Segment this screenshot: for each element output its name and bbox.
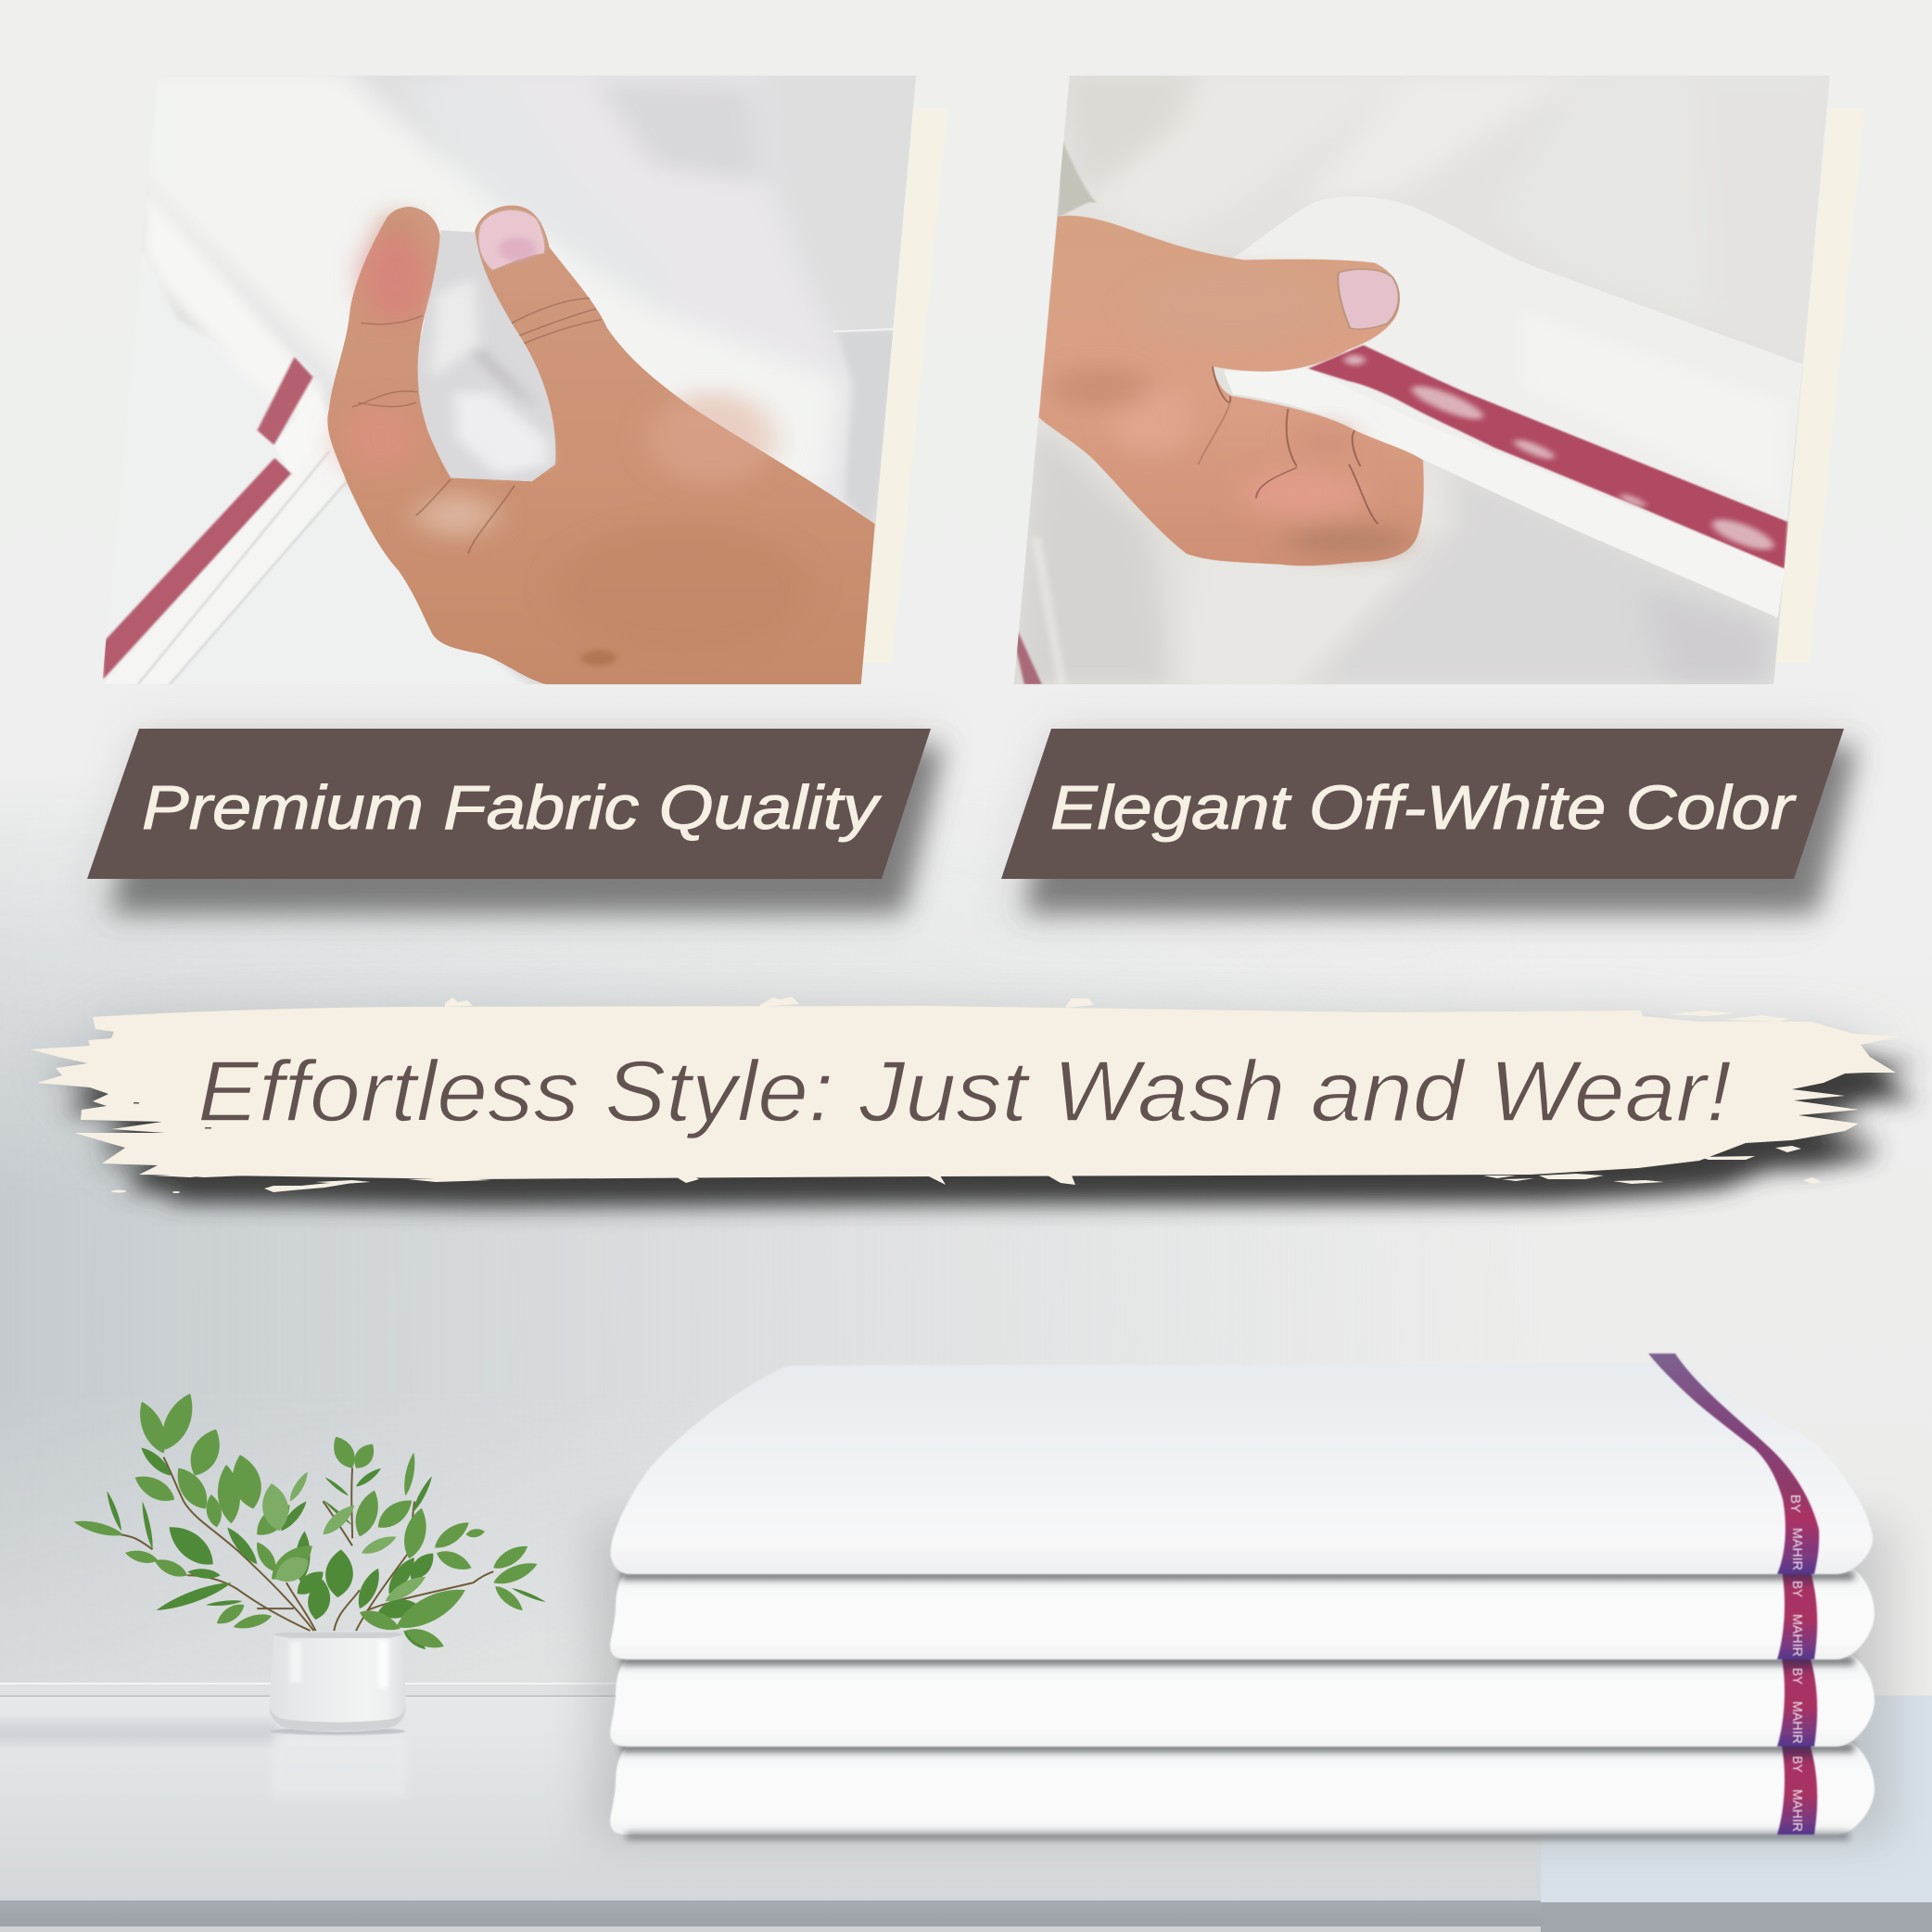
lower left fabric — [102, 255, 527, 684]
table front edge right — [1541, 1902, 1932, 1932]
skin shading — [324, 201, 786, 544]
brush shape — [31, 1006, 1900, 1179]
fabric sheen — [430, 277, 549, 475]
skin creases — [352, 299, 602, 553]
table front edge — [0, 1900, 1541, 1926]
fold three — [610, 1655, 1875, 1747]
panel: premium fabric quality photo — [74, 56, 947, 703]
brush speckles — [111, 997, 1822, 1193]
pinched fabric — [418, 230, 555, 481]
banner label: Premium Fabric Quality — [142, 773, 882, 843]
fabric photo and hand — [1014, 76, 1830, 684]
thumb nail — [478, 210, 545, 271]
fold four — [610, 1743, 1875, 1835]
stripe woven text: MAHIR — [1789, 1528, 1805, 1570]
folded selvedge band — [1225, 197, 1802, 617]
stripe woven logo marks — [1344, 355, 1779, 555]
selvedge stripes — [103, 357, 347, 684]
panel: elegant off-white color photo — [1001, 56, 1871, 694]
banner glow — [1006, 732, 1849, 913]
leaves light — [259, 1469, 429, 1607]
table lower strip — [0, 1926, 1541, 1932]
hand skin — [327, 206, 875, 686]
folded fabric stack — [593, 1354, 1891, 1840]
crimson selvedge stripe — [1308, 345, 1787, 568]
banner: premium fabric quality — [87, 729, 944, 913]
cream offset block — [858, 109, 947, 663]
stripe woven text — [1787, 1494, 1805, 1832]
stripe woven text: BY — [1789, 1668, 1805, 1684]
banner label: Elegant Off-White Color — [1050, 773, 1797, 843]
leaves mid — [72, 1389, 540, 1653]
thumb nail — [1338, 269, 1399, 329]
banner glow — [93, 732, 936, 913]
banner plate — [1001, 729, 1844, 879]
finger creases — [1198, 366, 1378, 524]
skin blemish — [581, 651, 616, 666]
potted plant — [72, 1389, 546, 1797]
pot — [269, 1633, 406, 1732]
stripe woven text: MAHIR — [1789, 1614, 1805, 1657]
banner: elegant off-white color — [1001, 729, 1857, 913]
stripe woven text: BY — [1789, 1581, 1805, 1597]
skin shading — [1048, 269, 1413, 556]
fold one shadow — [621, 1571, 1854, 1580]
stripe woven text: BY — [1787, 1494, 1803, 1513]
fold two — [610, 1568, 1875, 1659]
banner shadow — [111, 746, 944, 913]
stripe woven text: MAHIR — [1789, 1701, 1805, 1744]
banner plate — [87, 729, 931, 879]
leaves dark — [105, 1443, 546, 1652]
fold four floor shadow — [626, 1833, 1849, 1839]
brush shadow — [53, 1034, 1923, 1207]
background wall and table — [0, 838, 1932, 1932]
stripe woven text: BY — [1789, 1756, 1805, 1773]
hand skin — [1039, 216, 1424, 566]
fold three shadow — [621, 1744, 1854, 1752]
table ledge — [0, 1683, 1932, 1697]
headline text: Effortless Style: Just Wash and Wear! — [197, 1043, 1732, 1139]
pot reflection — [272, 1735, 407, 1797]
brush stroke headline — [31, 997, 1923, 1207]
fold one (top) — [611, 1355, 1873, 1574]
stripe woven text: MAHIR — [1789, 1789, 1805, 1832]
brush glow — [31, 1006, 1900, 1179]
branches — [112, 1457, 493, 1631]
table top — [0, 1697, 1541, 1900]
fold two shadow — [621, 1657, 1854, 1665]
brush detail marks — [133, 1102, 211, 1129]
pot contact shadow — [270, 1727, 405, 1735]
fabric photo and hand — [102, 76, 916, 684]
stack ambient shadow — [593, 1520, 1891, 1840]
cream offset block — [1774, 109, 1864, 663]
selvedge stripes on folds — [1648, 1354, 1819, 1835]
table top right patch — [1541, 1696, 1932, 1902]
banner shadow — [1024, 746, 1857, 913]
table shadow band — [0, 1722, 278, 1743]
